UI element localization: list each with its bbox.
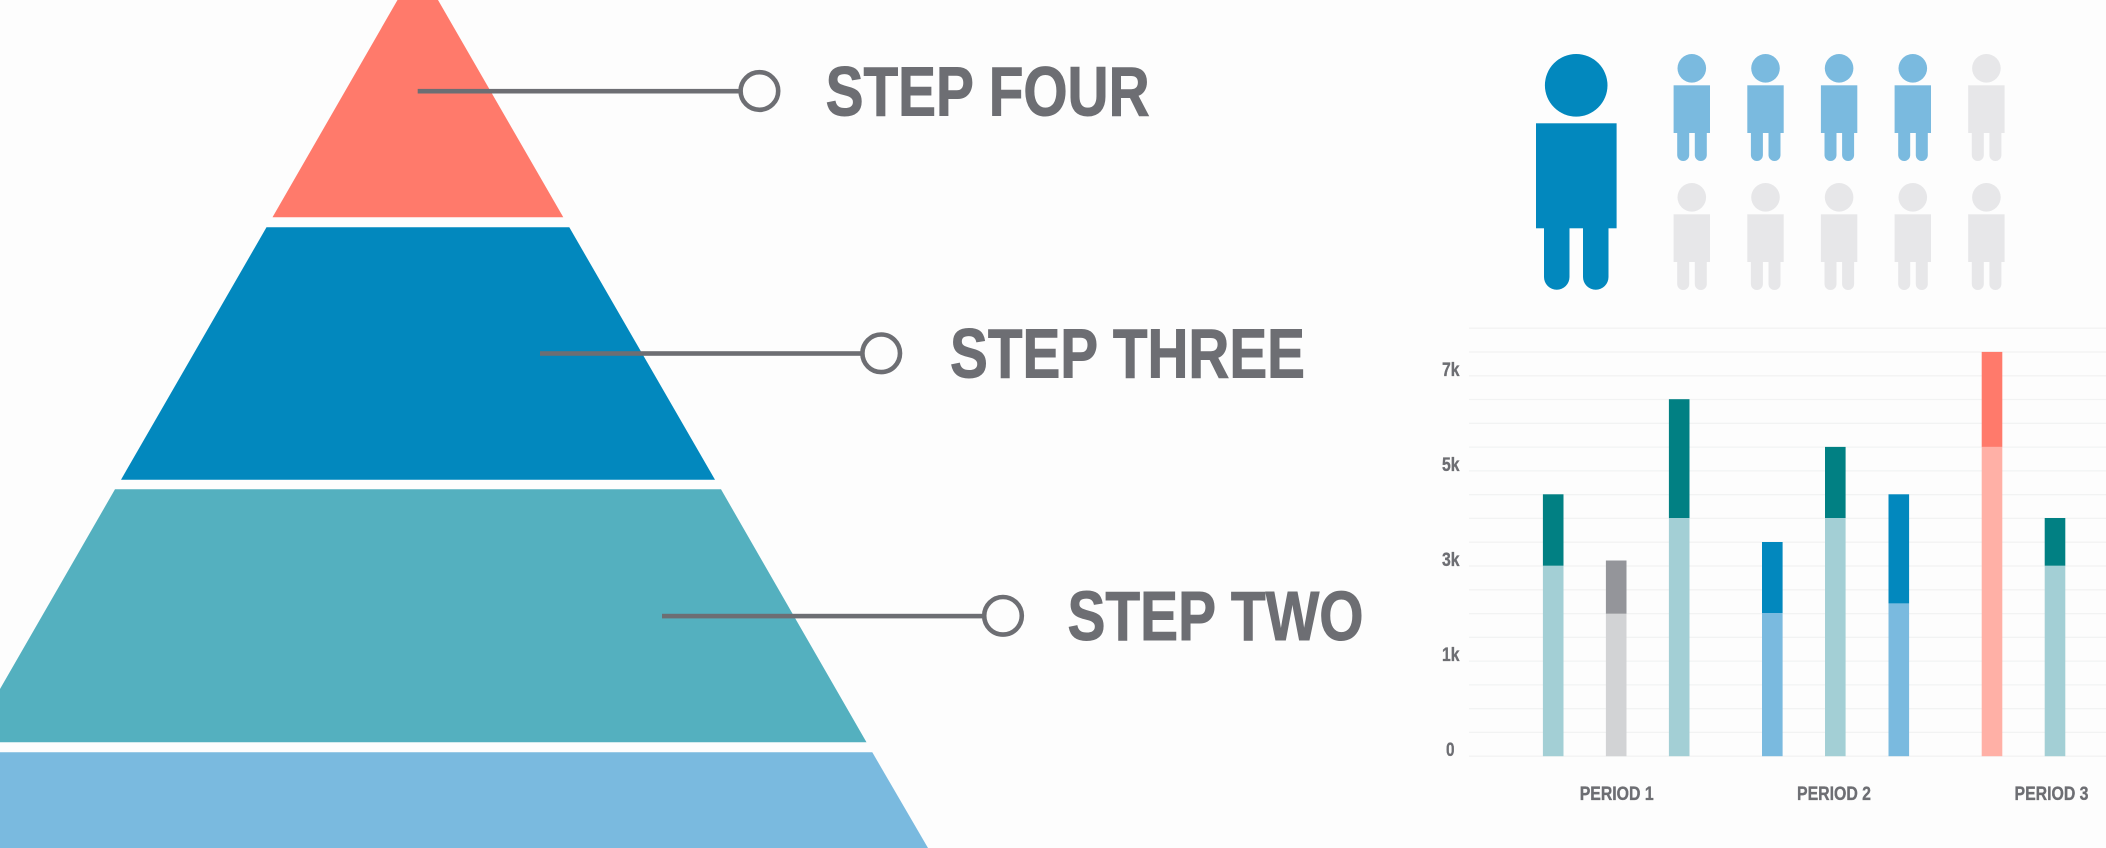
person 8	[1821, 183, 1857, 290]
callout: step two	[662, 577, 1364, 655]
y axis labels	[1442, 360, 1460, 761]
person 3	[1821, 54, 1857, 161]
person 9	[1895, 183, 1931, 290]
marker circle	[862, 334, 900, 372]
label: STEP THREE	[950, 315, 1305, 393]
person 10	[1968, 183, 2005, 290]
bars: period 3	[1982, 352, 2065, 756]
pyramid tier: step two	[0, 489, 866, 742]
person 4	[1895, 54, 1931, 161]
icon row: small people, bottom	[1674, 183, 2005, 290]
pyramid tier: step three	[121, 227, 715, 480]
label: STEP TWO	[1068, 577, 1364, 655]
y axis labels: 3k	[1442, 550, 1460, 571]
marker circle	[741, 72, 778, 110]
callout: step three	[540, 315, 1305, 393]
leader line	[418, 89, 741, 94]
marker circle	[984, 597, 1022, 635]
bars: period 1	[1543, 399, 1690, 756]
leader line	[540, 351, 863, 356]
pyramid	[0, 0, 928, 848]
callout: step four	[418, 52, 1150, 130]
pyramid tier: step four	[272, 0, 563, 217]
person 5	[1968, 54, 2005, 161]
icon: large person	[1536, 54, 1617, 290]
person 2	[1747, 54, 1784, 161]
y axis labels: 5k	[1442, 455, 1460, 476]
bars: period 2	[1762, 447, 1909, 756]
y axis labels: 1k	[1442, 645, 1460, 666]
person 7	[1747, 183, 1784, 290]
person 6	[1674, 183, 1710, 290]
y axis labels: 0	[1446, 740, 1454, 761]
label: STEP FOUR	[826, 52, 1150, 130]
leader line	[662, 614, 985, 618]
person 1	[1674, 54, 1710, 161]
x axis labels: PERIOD 3	[2014, 784, 2088, 805]
x axis labels: PERIOD 2	[1797, 784, 1871, 805]
bar chart	[1442, 328, 2106, 805]
icon row: small people, top	[1674, 54, 2005, 161]
pyramid tier: step one	[0, 752, 928, 848]
x axis labels	[1580, 784, 2088, 805]
x axis labels: PERIOD 1	[1580, 784, 1654, 805]
y axis labels: 7k	[1442, 360, 1460, 381]
